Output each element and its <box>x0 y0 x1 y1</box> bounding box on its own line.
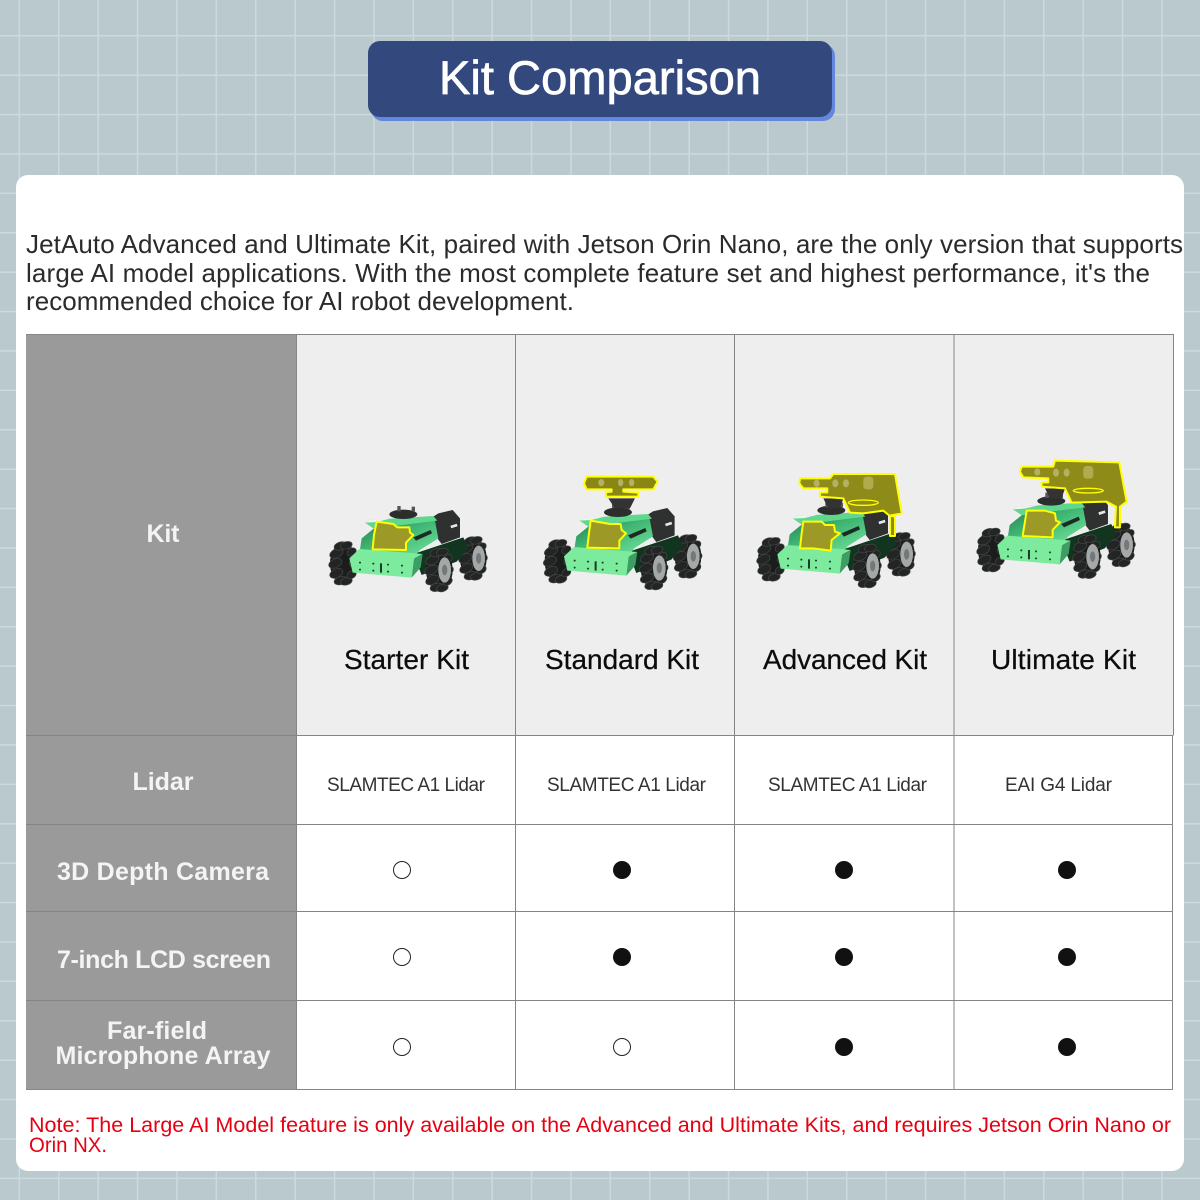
row labels: 3D Depth Camera <box>57 858 270 886</box>
intro text <box>26 229 1183 316</box>
header row background <box>296 334 1174 735</box>
robot: Ultimate Kit <box>975 461 1137 580</box>
robot: Starter Kit <box>327 506 489 593</box>
feature marks <box>394 861 1076 1056</box>
label column background <box>26 334 296 1090</box>
kit names: Starter Kit <box>344 644 469 675</box>
note <box>29 1113 1171 1157</box>
kit names: Advanced Kit <box>763 644 927 675</box>
lidar row values: EAI G4 Lidar <box>1005 775 1113 796</box>
comparison table <box>26 334 1174 1090</box>
lidar row values: SLAMTEC A1 Lidar <box>768 775 928 796</box>
note: Note: The Large AI Model feature is only available on the Advanced and Ultimate Kits, and requires Jetson Orin Nano or <box>29 1113 1171 1137</box>
lidar row values: SLAMTEC A1 Lidar <box>547 775 707 796</box>
row labels: Lidar <box>132 768 194 796</box>
row labels: Far-field <box>107 1017 207 1045</box>
note: Orin NX. <box>29 1133 107 1157</box>
row labels: Microphone Array <box>56 1042 271 1070</box>
title banner <box>368 41 835 121</box>
row labels: 7-inch LCD screen <box>57 946 271 974</box>
intro text: JetAuto Advanced and Ultimate Kit, paired with Jetson Orin Nano, are the only version that supports <box>26 229 1183 259</box>
kit names <box>344 644 1136 675</box>
lidar row values: SLAMTEC A1 Lidar <box>327 775 486 796</box>
intro text: large AI model applications. With the most complete feature set and highest performance, it's the <box>26 258 1150 288</box>
title: Kit Comparison <box>439 51 761 104</box>
row labels: Kit <box>146 520 180 548</box>
robot: Advanced Kit <box>755 474 917 589</box>
kit names: Standard Kit <box>545 644 699 675</box>
intro text: recommended choice for AI robot development. <box>26 286 574 316</box>
kit names: Ultimate Kit <box>991 644 1136 675</box>
row labels <box>56 520 271 1070</box>
robot: Standard Kit <box>542 477 704 591</box>
lidar row values <box>327 775 1113 796</box>
